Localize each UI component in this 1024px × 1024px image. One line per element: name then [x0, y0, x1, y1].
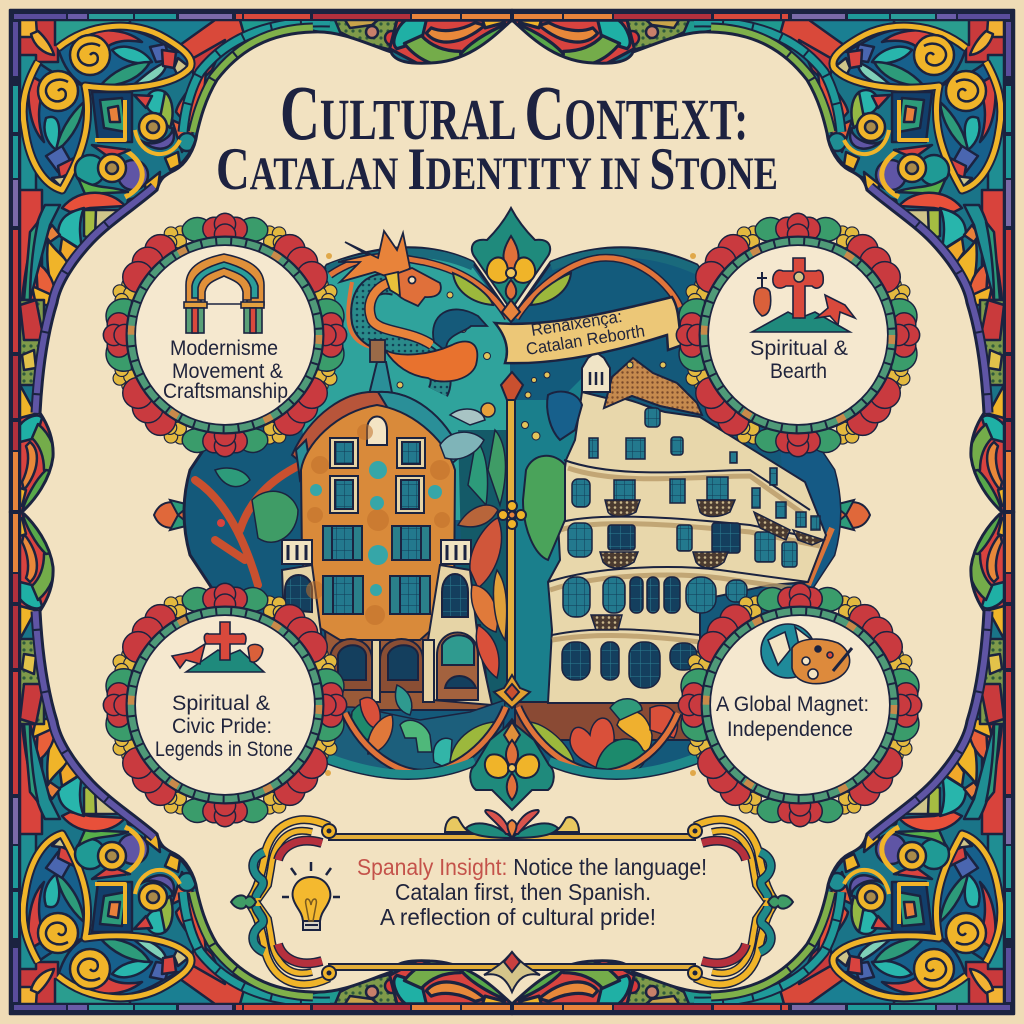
callout frame: [231, 810, 793, 992]
label: [750, 337, 848, 383]
banner: Renaixença:: [530, 307, 623, 340]
banner: [495, 297, 682, 363]
cream bays: [281, 565, 322, 635]
circle: global magnet: [678, 583, 922, 827]
main body: [548, 392, 826, 703]
circle: spiritual and bearth: [676, 213, 920, 457]
title: [216, 69, 778, 202]
facade windows: [330, 438, 358, 468]
label: Bearth: [770, 360, 827, 383]
icon: globe and palette: [761, 624, 852, 684]
label: Movement &: [172, 360, 283, 383]
ground arches: [330, 639, 372, 690]
label: Independence: [727, 718, 853, 741]
banner: Catalan Reborth: [525, 321, 646, 359]
title: CATALAN IDENTITY IN STONE: [216, 136, 778, 202]
tower: [582, 352, 610, 392]
knight helmet ornament: [440, 403, 495, 459]
label: Spiritual &: [172, 692, 270, 715]
top ornament: [453, 208, 571, 322]
callout: insight: [231, 810, 793, 992]
icon: lightbulb: [282, 862, 340, 930]
facade blue flowers: [310, 461, 442, 596]
side flower left: [154, 500, 190, 530]
floating dots: [397, 292, 666, 440]
circle: civic pride: [103, 583, 347, 827]
attic window: [367, 416, 387, 445]
orange lower arcs: [345, 707, 506, 773]
bottom ornament flower: [470, 722, 554, 810]
spire: [368, 361, 393, 392]
stone bands: [550, 468, 820, 642]
sky right: [515, 318, 581, 701]
upper orange arches: [330, 257, 680, 318]
right-side dark panel: [781, 451, 840, 587]
bay windows: [285, 575, 312, 612]
dragon: [338, 231, 487, 392]
bottom plants: [330, 685, 678, 780]
label: Civic Pride:: [172, 715, 272, 738]
label: A Global Magnet:: [716, 693, 869, 716]
circle: modernisme: [103, 213, 347, 457]
right foliage of building: [458, 430, 507, 678]
label: Legends in Stone: [155, 738, 293, 761]
side flower right: [834, 500, 870, 530]
roof tiles: [290, 390, 452, 460]
callout text: A reflection of cultural pride!: [380, 904, 656, 930]
label: Craftsmanship: [163, 380, 288, 403]
icon: cross and dragon: [172, 622, 264, 672]
center pole: [494, 372, 530, 708]
label: Modernisme: [170, 337, 278, 360]
ground: [515, 702, 700, 740]
label: Spiritual &: [750, 337, 848, 360]
label: [163, 337, 288, 403]
decorative dots: [325, 253, 696, 776]
side teal shapes: [296, 440, 310, 480]
dark foliage panel by pole: [458, 430, 508, 710]
central illustration: [154, 208, 870, 780]
label: [155, 692, 293, 761]
callout text: [357, 854, 707, 930]
tile roof: [604, 358, 702, 415]
facade mottling: [306, 424, 450, 625]
title: CULTURAL CONTEXT:: [280, 69, 748, 156]
icon: cross and dragon: [752, 258, 855, 332]
arch panels base: [184, 248, 840, 779]
brown ground: [325, 625, 490, 710]
callout text: Catalan first, then Spanish.: [395, 879, 651, 905]
Casa Batllo building: [282, 362, 492, 710]
teal sky left: [300, 255, 510, 520]
orange facade: [301, 405, 455, 640]
dark teal band arcs: [327, 758, 475, 775]
icon: arch: [184, 254, 264, 333]
label: [716, 693, 869, 741]
left foliage and branches: [195, 465, 300, 585]
Casa Mila building: [515, 352, 826, 740]
bush beside Mila: [523, 456, 565, 560]
callout text: Spanaly Insight: Notice the language!: [357, 854, 707, 880]
